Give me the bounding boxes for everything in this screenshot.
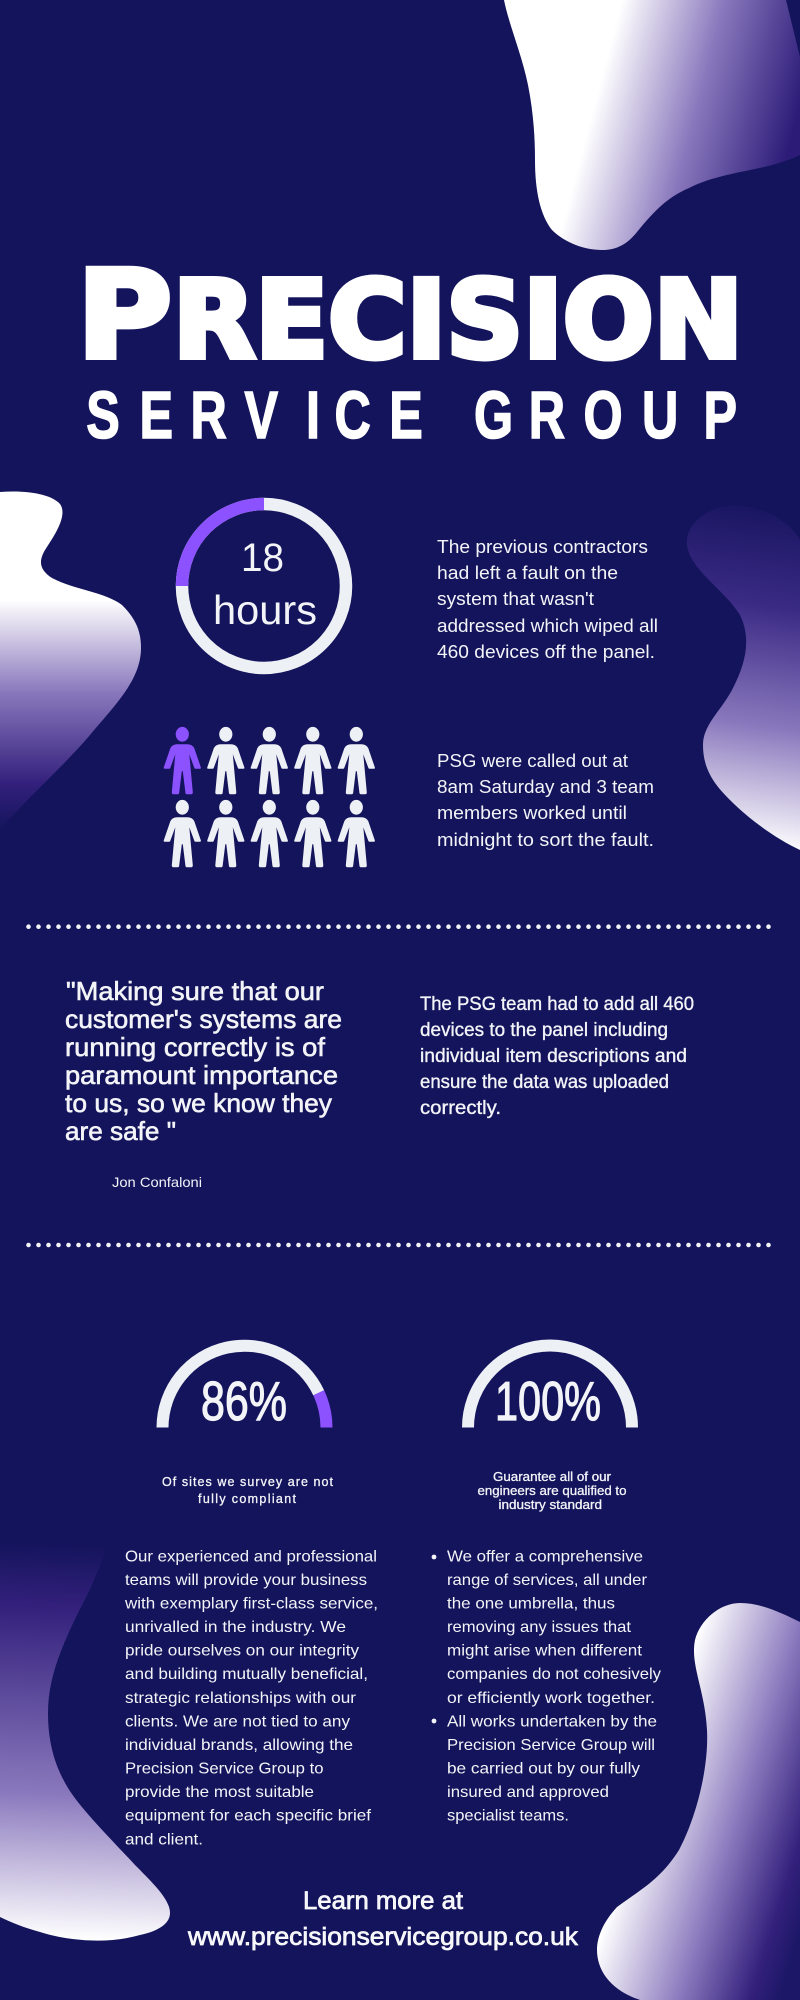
text: PSG team task — [420, 994, 694, 1119]
quote attribution: Jon Confaloni — [112, 1174, 202, 1190]
caption: sites compliant: Of sites we survey are not — [162, 1475, 334, 1489]
caption: sites compliant: fully compliant — [198, 1492, 297, 1506]
bullet list: services: be carried out by our fully — [447, 1760, 640, 1778]
quote: paramount importance — [65, 1060, 338, 1090]
text: experienced teams paragraph: clients. We are not tied to any — [125, 1713, 350, 1730]
text: previous contractors: had left a fault on the — [437, 562, 618, 583]
blob: middle left — [0, 492, 141, 830]
quote: are safe " — [65, 1116, 176, 1146]
text: experienced teams paragraph: and building mutually beneficial, — [125, 1666, 368, 1683]
text: PSG called out: 8am Saturday and 3 team — [437, 776, 654, 797]
text: PSG team task: The PSG team had to add all 460 — [420, 994, 694, 1015]
text: previous contractors: addressed which wiped all — [437, 615, 658, 636]
text: experienced teams paragraph: pride ourselves on our integrity — [125, 1642, 359, 1660]
bullet list: services: or efficiently work together. — [447, 1690, 655, 1707]
bullet list: services: insured and approved — [447, 1784, 609, 1801]
text: PSG called out: midnight to sort the fault. — [437, 829, 654, 850]
bullet list: services: the one umbrella, thus — [447, 1596, 615, 1612]
text: experienced teams paragraph: Our experienced and professional — [125, 1548, 377, 1565]
blob: bottom left — [0, 1525, 170, 1941]
title: Precision: P — [77, 245, 172, 386]
text: PSG team task: ensure the data was uploaded — [420, 1072, 669, 1093]
text: PSG team task: devices to the panel including — [420, 1020, 668, 1041]
subtitle: Service Group: SERVICE GROUP — [86, 377, 737, 453]
quote: customer's systems are — [65, 1004, 342, 1034]
quote — [65, 976, 342, 1146]
text: experienced teams paragraph: unrivalled in the industry. We — [125, 1619, 346, 1636]
text: experienced teams paragraph: and client. — [125, 1831, 203, 1848]
text: experienced teams paragraph: with exemplary first-class service, — [124, 1596, 378, 1612]
text: previous contractors: The previous contractors — [437, 536, 648, 557]
text: experienced teams paragraph: individual brands, allowing the — [125, 1737, 353, 1754]
text: previous contractors: 460 devices off the panel. — [437, 641, 655, 662]
bullet list: services: Precision Service Group will — [447, 1737, 655, 1754]
quote: "Making sure that our — [66, 976, 324, 1006]
blob: middle right — [687, 506, 800, 850]
bullet list: services: All works undertaken by the — [447, 1713, 657, 1730]
text: experienced teams paragraph: equipment for each specific brief — [125, 1808, 372, 1824]
quote: to us, so we know they — [65, 1088, 332, 1118]
quote: running correctly is of — [65, 1032, 326, 1062]
call to action — [187, 1887, 579, 1951]
bullet list: services: removing any issues that — [447, 1619, 632, 1636]
text: experienced teams paragraph: provide the most suitable — [125, 1784, 314, 1801]
call to action: www.precisionservicegroup.co.uk — [187, 1923, 579, 1951]
blob: top right — [504, 0, 800, 250]
bullet list: services: companies do not cohesively — [447, 1666, 661, 1683]
text: PSG team task: individual item descriptions and — [420, 1046, 687, 1067]
gauge: 100%: 100% — [495, 1370, 601, 1432]
text: previous contractors: system that wasn't — [437, 588, 594, 609]
text: PSG called out: PSG were called out at — [437, 750, 628, 771]
pictogram: ten people, one highlighted — [164, 727, 375, 867]
text: PSG team task: correctly. — [420, 1098, 501, 1119]
stat ring: 18 hours: hours — [213, 587, 317, 633]
gauge: 86%: 86% — [201, 1370, 287, 1432]
text: experienced teams paragraph: strategic relationships with our — [125, 1690, 357, 1707]
bullet list: services — [432, 1548, 661, 1824]
text: experienced teams paragraph: teams will provide your business — [125, 1572, 367, 1589]
stat ring: 18 hours: 18 — [241, 536, 284, 580]
bullet list: services: might arise when different — [447, 1642, 643, 1660]
caption: engineers qualified: Guarantee all of our — [493, 1469, 612, 1484]
text: PSG called out — [437, 750, 654, 850]
icon: highlighted person — [164, 727, 201, 794]
title: Precision: RECISION — [173, 259, 743, 383]
stat ring: 18 hours — [182, 504, 346, 668]
text: experienced teams paragraph: Precision Service Group to — [125, 1760, 324, 1778]
caption: sites compliant — [162, 1475, 334, 1506]
text: experienced teams paragraph — [124, 1548, 378, 1848]
bullet list: services: We offer a comprehensive — [447, 1548, 643, 1565]
text: previous contractors — [437, 536, 658, 662]
bullet list: services: specialist teams. — [447, 1808, 569, 1824]
bullet list: services: range of services, all under — [447, 1572, 648, 1589]
caption: engineers qualified: engineers are qualified to — [478, 1483, 626, 1498]
gauge: 86% — [162, 1346, 326, 1432]
call to action: Learn more at — [303, 1887, 463, 1915]
blob: bottom right — [597, 1603, 800, 2000]
text: PSG called out: members worked until — [437, 802, 627, 823]
caption: engineers qualified — [478, 1469, 626, 1512]
gauge: 100% — [468, 1345, 632, 1432]
caption: engineers qualified: industry standard — [498, 1497, 602, 1512]
